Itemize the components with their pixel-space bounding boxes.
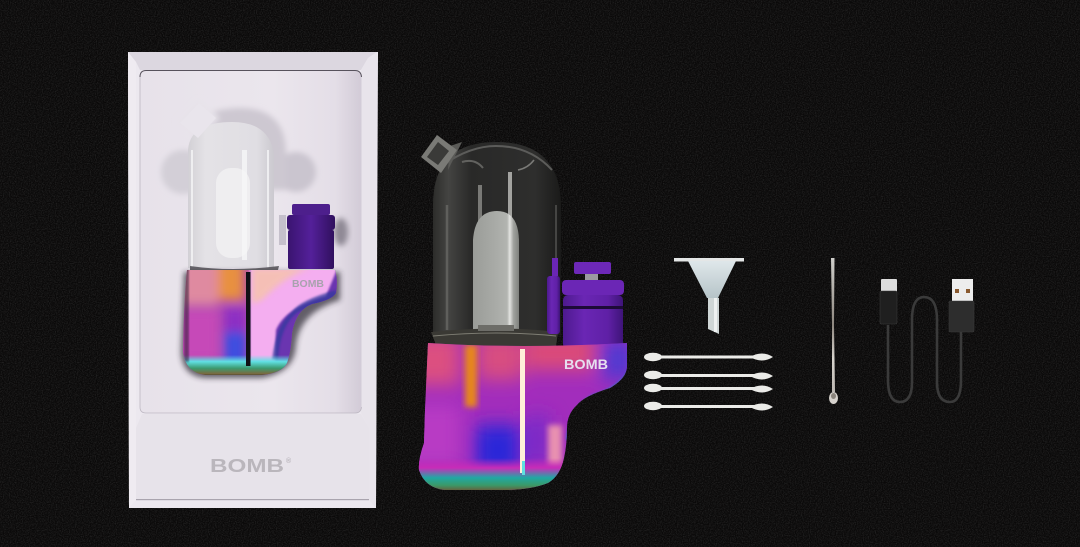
small device logo: BOMB [292, 278, 324, 290]
USB-A connector [949, 279, 974, 332]
small purple chamber [279, 204, 348, 269]
purple chamber [562, 262, 624, 349]
small device shadow [181, 272, 340, 378]
frosted inner tube [473, 211, 519, 332]
flap logo: BOMB [210, 456, 284, 476]
glass dome [433, 142, 561, 340]
small glass in tray [188, 122, 274, 268]
icon: funnel [674, 258, 744, 334]
panel: open packaging box [128, 52, 378, 508]
iridescent base [418, 343, 627, 490]
icon: dab tool [829, 258, 838, 404]
USB-C connector [880, 279, 897, 324]
small iridescent base [183, 270, 337, 375]
glass bottom seal [431, 325, 558, 348]
box inner tray [140, 70, 362, 414]
box outer frame [128, 52, 378, 508]
lower box flap: ® [286, 457, 292, 465]
panel: main device [418, 135, 627, 490]
icon: USB cable [880, 279, 974, 402]
device logo: BOMB [564, 356, 608, 372]
purple side switch [547, 258, 560, 334]
icon: cotton swabs [644, 353, 773, 410]
tray recess for the glass [161, 100, 316, 270]
glass mouthpiece [421, 135, 462, 173]
lower box flap [136, 414, 369, 500]
